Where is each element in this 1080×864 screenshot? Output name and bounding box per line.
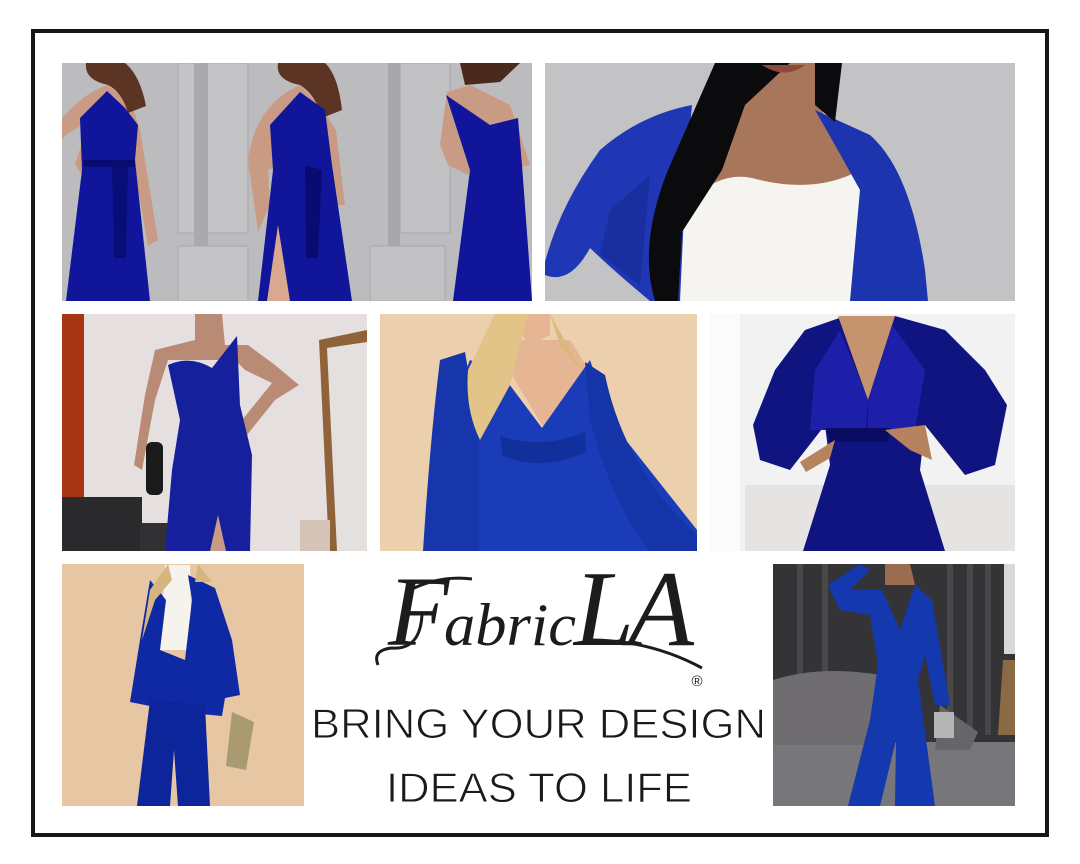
figure 2 bbox=[248, 85, 345, 232]
tagline line 2: IDEAS TO LIFE bbox=[386, 764, 692, 811]
left sleeve bbox=[545, 105, 692, 301]
figure 1 bbox=[62, 85, 158, 246]
right lapel and sleeve bbox=[815, 110, 928, 301]
logo: FabricLA wordmark: abric bbox=[444, 592, 576, 658]
logo: FabricLA wordmark bbox=[377, 550, 702, 669]
photo: velvet pantsuit on beige bbox=[62, 564, 304, 806]
hair bbox=[649, 63, 790, 301]
photo: three views of one-shoulder velvet dress bbox=[62, 63, 532, 301]
logo: FabricLA wordmark: F bbox=[387, 556, 450, 667]
photo: one-shoulder gown by a mirror bbox=[62, 314, 367, 551]
photo: plunging velvet wrap dress bbox=[710, 314, 1015, 551]
logo: FabricLA wordmark: L bbox=[572, 550, 634, 669]
logo: FabricLA wordmark: A bbox=[622, 550, 695, 669]
logo and tagline bbox=[311, 550, 766, 811]
figure 3 bbox=[440, 85, 530, 175]
photo: velvet jumpsuit in dark room bbox=[773, 564, 1015, 806]
photo: V-neck velvet dress on beige bbox=[380, 314, 697, 551]
photo: velvet jacket with white top bbox=[545, 63, 1015, 301]
tagline line 1: BRING YOUR DESIGN bbox=[311, 700, 766, 747]
registered mark: ® bbox=[691, 673, 703, 690]
